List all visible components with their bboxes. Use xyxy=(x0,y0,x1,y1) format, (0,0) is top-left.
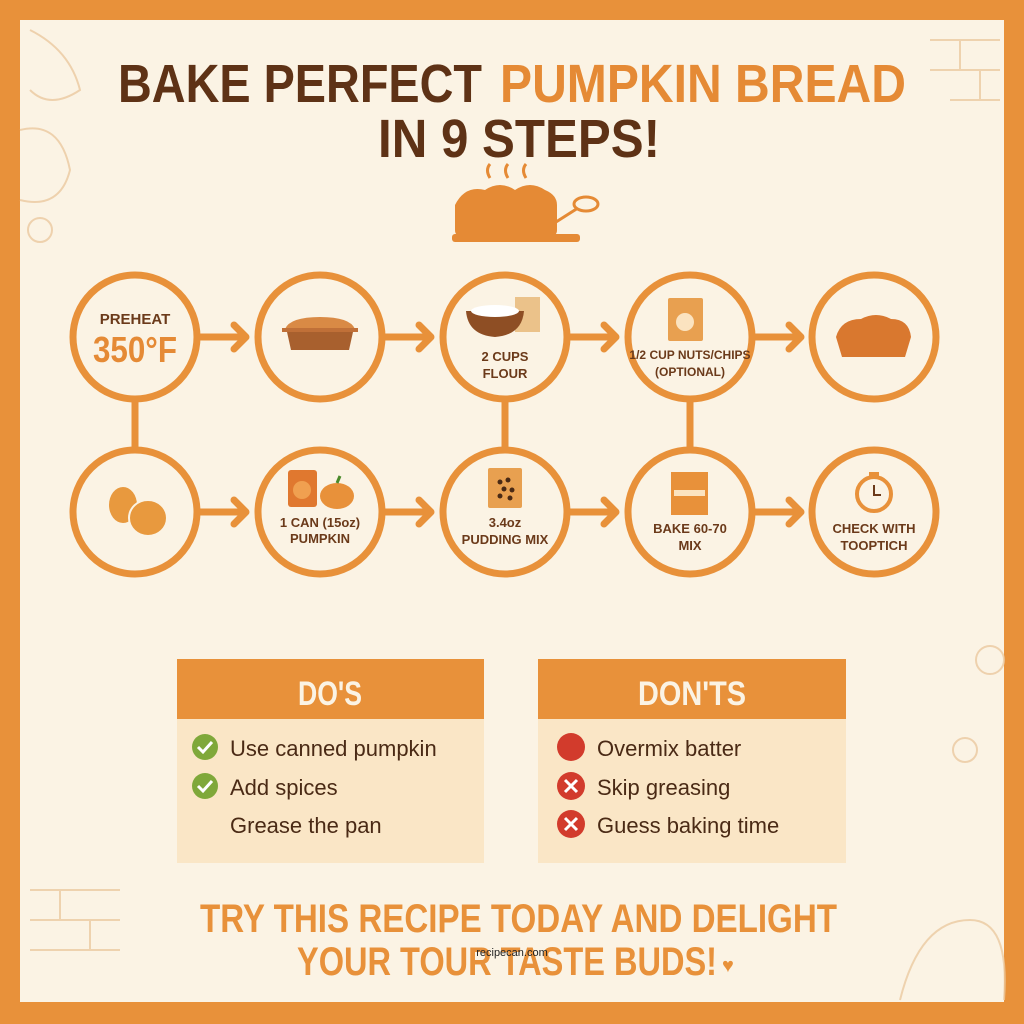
panel: don'ts: DON'TS xyxy=(638,675,746,713)
panel: do's xyxy=(177,659,484,863)
step 1: preheat: PREHEAT xyxy=(100,311,170,328)
step 5: loaf xyxy=(812,275,936,399)
closing message: ♥ xyxy=(722,955,734,977)
step 1: preheat xyxy=(73,275,197,399)
closing message xyxy=(200,897,837,984)
step 9: bake: BAKE 60-70 xyxy=(653,521,727,536)
step 4: nuts: (OPTIONAL) xyxy=(655,365,725,379)
panel: do's: Use canned pumpkin xyxy=(230,736,437,761)
step 3: flour xyxy=(443,275,567,399)
step 4: nuts: 1/2 CUP NUTS/CHIPS xyxy=(629,348,751,362)
step 10: check: TOOPTICH xyxy=(841,538,907,553)
step 3: flour: 2 CUPS xyxy=(482,349,529,364)
step 8: pudding: 3.4oz xyxy=(489,515,522,530)
closing message: TRY THIS RECIPE TODAY AND DELIGHT xyxy=(200,897,837,941)
arrows xyxy=(198,325,801,524)
step 9: bake: MIX xyxy=(678,538,702,553)
step 3: flour: FLOUR xyxy=(483,366,528,381)
step 7: pumpkin: PUMPKIN xyxy=(290,531,350,546)
closing message: recipecan.com xyxy=(476,947,548,959)
step 10: check: CHECK WITH xyxy=(832,521,916,536)
step 8: pudding: PUDDING MIX xyxy=(462,532,549,547)
step 6: eggs xyxy=(73,450,197,574)
closing message: YOUR TOUR TASTE BUDS! xyxy=(297,940,717,984)
step 2: pan xyxy=(258,275,382,399)
step 4: nuts xyxy=(628,275,752,399)
step 7: pumpkin: 1 CAN (15oz) xyxy=(280,515,360,530)
panel: do's: DO'S xyxy=(298,675,362,713)
title: PUMPKIN BREAD xyxy=(500,54,906,114)
panel: don'ts: Skip greasing xyxy=(597,775,730,800)
panel: don'ts: Guess baking time xyxy=(597,813,779,838)
panel: do's: Add spices xyxy=(230,775,338,800)
title: IN 9 STEPS! xyxy=(378,109,660,169)
connectors xyxy=(135,400,690,450)
step 8: pudding xyxy=(443,450,567,574)
panel: do's: Grease the pan xyxy=(230,813,382,838)
panel: don'ts xyxy=(538,659,846,863)
step 10: check xyxy=(812,450,936,574)
panel: don'ts: Overmix batter xyxy=(597,736,741,761)
icon: loaf with whisk xyxy=(452,164,598,242)
step 1: preheat: 350°F xyxy=(93,329,177,370)
step 7: pumpkin xyxy=(258,450,382,574)
title: BAKE PERFECT xyxy=(118,54,482,114)
step 9: bake xyxy=(628,450,752,574)
title xyxy=(118,54,906,169)
